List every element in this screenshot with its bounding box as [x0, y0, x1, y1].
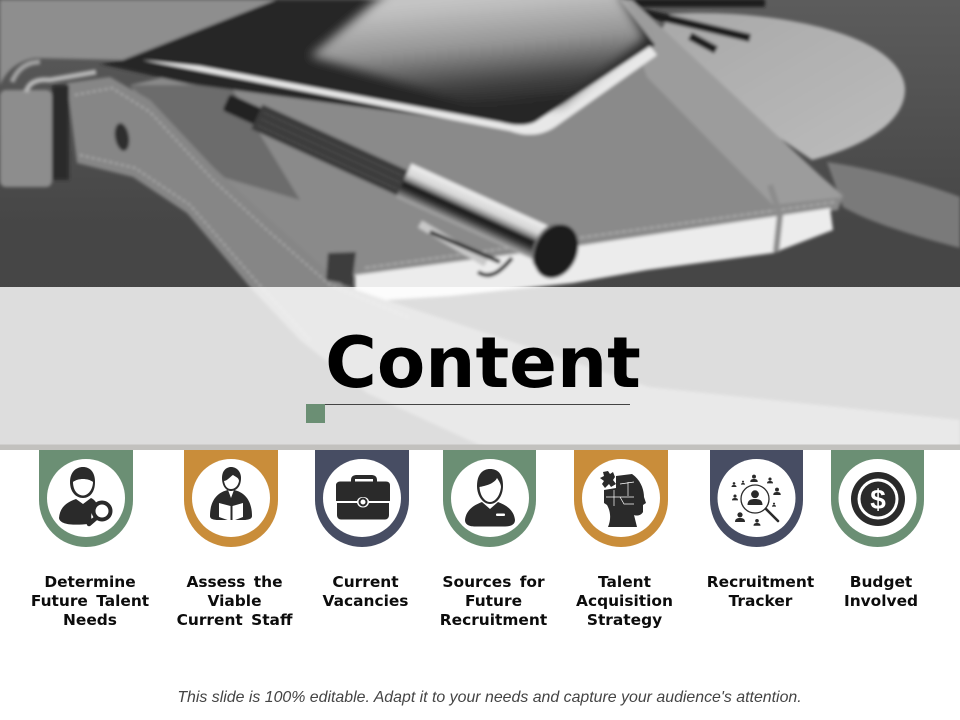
- label: Sources for: [442, 573, 545, 591]
- badge: orange: [184, 450, 278, 547]
- item: Sources for Future Recruitment: [440, 450, 547, 629]
- label: Current Staff: [177, 611, 293, 629]
- leather disc: [650, 13, 905, 160]
- right strap: [827, 162, 960, 248]
- notebook band: [620, 0, 843, 205]
- pen clip: [420, 224, 486, 263]
- title underline with green square: [306, 404, 630, 423]
- left strap: [67, 77, 960, 450]
- pen: [215, 76, 587, 286]
- item: Current Vacancies: [315, 450, 409, 610]
- icon: dollar coin: [851, 472, 905, 526]
- label: Current: [332, 573, 399, 591]
- badge: orange: [574, 450, 668, 547]
- title: Content: [325, 322, 641, 404]
- notebook pages: [355, 208, 833, 302]
- label: Future Talent: [31, 592, 149, 610]
- badge: green: [443, 450, 536, 547]
- translucent title band: [0, 287, 960, 445]
- icon: person with magnifier: [59, 467, 110, 525]
- photo background: bag, notebook, phone and pen: [0, 0, 960, 450]
- icon: person reading book: [210, 467, 252, 521]
- notebook cover: [130, 0, 843, 276]
- label: Assess the: [186, 573, 283, 591]
- label: Involved: [844, 592, 918, 610]
- phone screen reflection: [310, 0, 645, 105]
- label: Determine: [44, 573, 136, 591]
- badge: green: [39, 450, 133, 547]
- glasses: [625, 3, 765, 50]
- icon: magnifier over people network: [732, 475, 781, 526]
- badge: navy: [710, 450, 803, 547]
- label: Recruitment: [707, 573, 814, 591]
- label: Strategy: [587, 611, 662, 629]
- label: Future: [465, 592, 522, 610]
- label: Viable: [207, 592, 262, 610]
- icon: head with puzzle pieces: [600, 471, 646, 527]
- title bar base line: [0, 444, 960, 450]
- footer note: This slide is 100% editable. Adapt it to your needs and capture your audience's attention.: [177, 689, 802, 706]
- inside of bag: [100, 0, 655, 128]
- label: Vacancies: [323, 592, 408, 610]
- item: Determine Future Talent Needs: [31, 450, 149, 629]
- label: Needs: [63, 611, 117, 629]
- bag flap: [0, 0, 276, 85]
- icon: dollar coin: $: [870, 484, 886, 515]
- item: Assess the Viable Current Staff: [177, 450, 293, 629]
- icon: person in uniform: [465, 469, 515, 526]
- badge: green: [831, 450, 924, 547]
- phone edge: [142, 46, 657, 135]
- badge: navy: [315, 450, 409, 547]
- label: Talent: [598, 573, 651, 591]
- item: Budget Involved: [831, 450, 924, 610]
- label: Tracker: [729, 592, 793, 610]
- label: Budget: [850, 573, 912, 591]
- label: Recruitment: [440, 611, 547, 629]
- item: Talent Acquisition Strategy: [574, 450, 673, 629]
- item: Recruitment Tracker: [707, 450, 814, 610]
- label: Acquisition: [576, 592, 673, 610]
- icon: briefcase: [336, 475, 390, 520]
